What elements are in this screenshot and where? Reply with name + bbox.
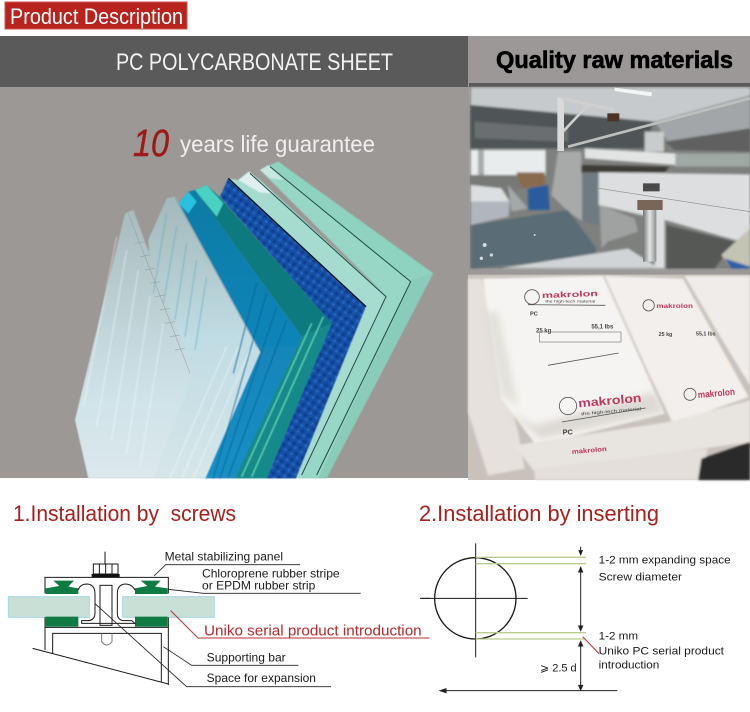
photo: Makrolon resin sacks — [468, 275, 750, 480]
heading: Quality raw materials: Quality raw materials — [496, 47, 733, 74]
diagram labels: Uniko serial product introduction — [204, 623, 422, 639]
diagram labels: Metal stabilizing panel — [165, 551, 283, 564]
diagram labels: Chloroprene rubber stripe — [202, 568, 340, 581]
heading: PC polycarbonate sheet: PC POLYCARBONATE SHEET — [116, 49, 393, 76]
heading: PC polycarbonate sheet — [0, 36, 468, 87]
panel: right column background — [468, 36, 750, 480]
diagram labels: Space for expansion — [207, 672, 316, 685]
heading: installation by screws: 1.Installation by screws — [13, 501, 236, 526]
photo: Makrolon resin sacks: PC — [563, 428, 574, 437]
diagram labels: Supporting bar — [207, 652, 286, 665]
photo: Makrolon resin sacks: 55,1 lbs — [696, 331, 716, 337]
polycarbonate sheets in section — [8, 597, 214, 617]
heading: Quality raw materials — [469, 47, 750, 87]
dimension labels: 1-2 mm expanding space — [599, 554, 731, 566]
photo: Makrolon resin sacks: 55,1 lbs — [591, 325, 614, 331]
screw hole circle with crosshair — [420, 543, 528, 657]
photo: Makrolon resin sacks: makrolon — [656, 304, 693, 310]
dimension labels: Screw diameter — [599, 571, 682, 583]
illustration: stacked polycarbonate sheets — [75, 162, 433, 478]
expansion guide lines — [476, 557, 586, 639]
diagram: insertion hole dimensions — [410, 543, 731, 693]
photo: Makrolon resin sacks: makrolon — [542, 289, 598, 300]
photo: Makrolon resin sacks: makrolon — [572, 446, 607, 456]
diagram labels — [165, 551, 422, 685]
dimension labels: 1-2 mm — [599, 630, 638, 642]
panel: left product panel background — [0, 87, 468, 478]
photo: extrusion factory line — [470, 88, 750, 268]
guarantee slogan: years life guarantee — [180, 131, 375, 157]
dimension arrows — [440, 547, 617, 693]
heading: installation by inserting: 2.Installation by inserting — [419, 501, 659, 526]
leader lines — [95, 565, 361, 687]
dimension labels: ⩾ 2.5 d — [540, 662, 577, 674]
dimension labels — [540, 554, 731, 674]
metal frame and screw — [33, 552, 168, 685]
guarantee slogan: 10 — [133, 123, 169, 165]
diagram labels: or EPDM rubber strip — [202, 580, 315, 593]
title badge: Product Description: Product Description — [10, 4, 183, 29]
photo: Makrolon resin sacks: 25 kg — [536, 329, 552, 335]
diagram: screw installation cross-section — [8, 551, 430, 687]
photo: Makrolon resin sacks: makrolon — [578, 391, 642, 410]
photo: Makrolon resin sacks: PC — [530, 311, 538, 317]
photo: Makrolon resin sacks: the high-tech material — [581, 406, 641, 416]
guarantee slogan — [133, 123, 375, 165]
dimension labels: introduction — [599, 659, 659, 671]
photo: Makrolon resin sacks: the high-tech material — [545, 300, 596, 304]
photo: Makrolon resin sacks: makrolon — [697, 387, 736, 400]
rubber gaskets — [46, 581, 168, 627]
dimension labels: Uniko PC serial product — [599, 646, 724, 658]
photo: Makrolon resin sacks: 25 kg — [659, 332, 672, 338]
